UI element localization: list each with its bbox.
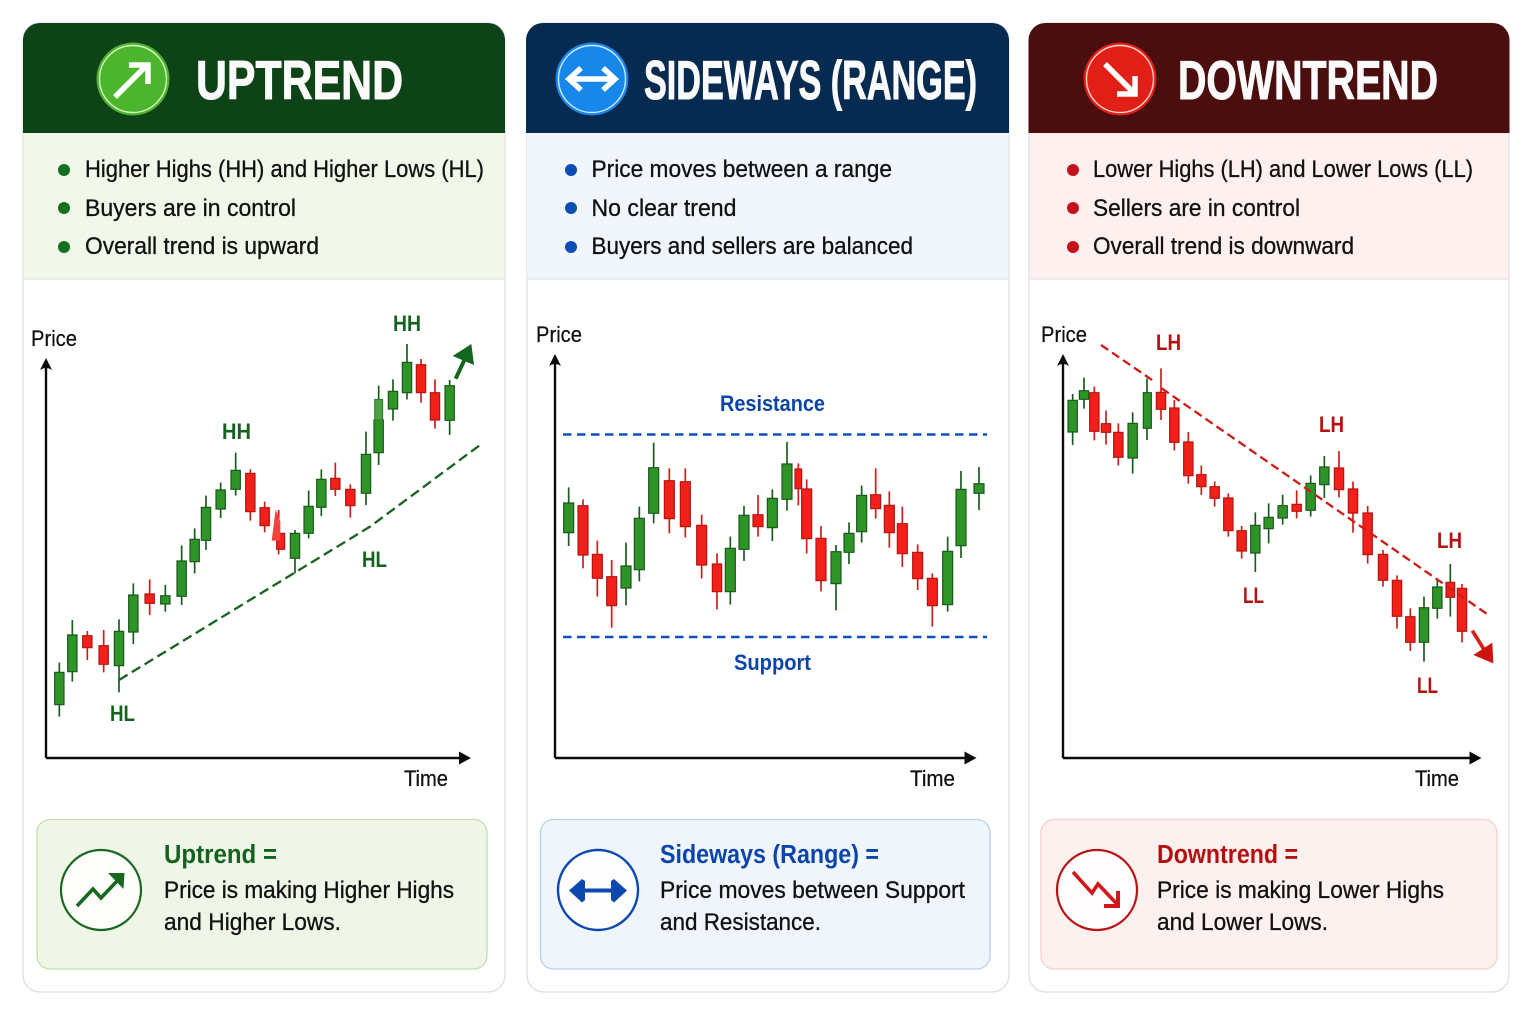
- callout heading: Downtrend =: Downtrend =: [1157, 841, 1298, 869]
- callout text: downtrend: and Lower Lows.: [1157, 909, 1328, 936]
- axes: downtrend: [1057, 354, 1482, 764]
- bullet list: sideways: Price moves between a range: [592, 156, 892, 183]
- icon: rising chart line: [61, 850, 141, 930]
- callout text: downtrend: [1157, 877, 1444, 936]
- panel: downtrend: [1028, 23, 1510, 992]
- bullet list: uptrend: Higher Highs (HH) and Higher Lows (HL): [85, 156, 484, 183]
- heading: DOWNTREND: DOWNTREND: [1178, 49, 1438, 111]
- callout text: uptrend: Price is making Higher Highs: [164, 877, 454, 904]
- bullet list: uptrend: Buyers are in control: [85, 195, 296, 222]
- axis label: Price: Price: [536, 322, 582, 347]
- bullet list: downtrend: Overall trend is downward: [1093, 233, 1354, 260]
- label: LH first: LH: [1156, 330, 1181, 355]
- label: HL low: HL: [110, 701, 135, 726]
- callout heading: Uptrend =: Uptrend =: [164, 841, 277, 869]
- header band: downtrend: [1028, 23, 1510, 133]
- panel frame: downtrend: [1029, 23, 1509, 992]
- callout text: sideways: and Resistance.: [660, 909, 821, 936]
- icon: up arrow badge: [96, 42, 170, 116]
- icon: down arrow badge: [1084, 42, 1156, 116]
- chart: sideways candlesticks: [536, 322, 987, 791]
- axis label: Price: Price: [31, 326, 77, 351]
- bullet list: sideways: No clear trend: [592, 195, 736, 222]
- heading: UPTREND: UPTREND: [196, 49, 403, 111]
- resistance line: [563, 433, 987, 436]
- label: LL first: LL: [1243, 583, 1264, 608]
- label: Resistance: Resistance: [720, 391, 825, 416]
- chart: downtrend candlesticks: [1041, 322, 1493, 791]
- callout heading: Sideways (Range) =: Sideways (Range) =: [660, 841, 879, 869]
- heading: SIDEWAYS (RANGE): SIDEWAYS (RANGE): [644, 49, 977, 111]
- axis label: Price: Price: [1041, 322, 1087, 347]
- callout: uptrend definition: [37, 820, 487, 969]
- label: HL middle: HL: [362, 547, 387, 572]
- candles and trendline: uptrend: [55, 344, 480, 717]
- panel: uptrend: [23, 23, 505, 992]
- bullet list: uptrend: Overall trend is upward: [85, 233, 319, 260]
- bullet list: downtrend: [1030, 133, 1508, 279]
- panel frame: sideways: [527, 23, 1009, 992]
- callout text: downtrend: Price is making Lower Highs: [1157, 877, 1444, 904]
- label: Support: Support: [734, 650, 812, 675]
- bullet list: uptrend: [24, 133, 504, 279]
- label: HH middle: HH: [222, 419, 251, 444]
- axes: sideways: [549, 354, 976, 764]
- label: LL second: LL: [1417, 673, 1438, 698]
- axis label: Time: Time: [910, 766, 955, 791]
- arrow: downtrend direction: [1472, 631, 1493, 663]
- callout text: sideways: Price moves between Support: [660, 877, 965, 904]
- candles: sideways: [564, 442, 984, 628]
- bullet list: sideways: Buyers and sellers are balanced: [592, 233, 913, 260]
- support line: [563, 636, 987, 638]
- callout: downtrend definition: [1041, 820, 1497, 969]
- label: LH third: LH: [1437, 528, 1462, 553]
- icon: falling chart line: [1057, 850, 1137, 930]
- icon: double arrow: [558, 850, 638, 930]
- panel: sideways range: [526, 23, 1009, 992]
- callout text: sideways: [660, 877, 965, 936]
- axes: uptrend: [40, 358, 471, 764]
- bullet list: downtrend: Sellers are in control: [1093, 195, 1300, 222]
- bullet list: downtrend: Lower Highs (LH) and Lower Lows (LL): [1093, 156, 1473, 183]
- label: LH second: LH: [1319, 412, 1344, 437]
- header band: sideways: [526, 23, 1009, 133]
- arrow: uptrend direction: [453, 344, 474, 379]
- header band: uptrend: [23, 23, 505, 133]
- panel frame: uptrend: [23, 23, 505, 992]
- bullet list: sideways: [527, 133, 1008, 279]
- callout text: uptrend: [164, 877, 454, 936]
- label: HH high: HH: [393, 311, 421, 336]
- candles and trendline: downtrend: [1068, 345, 1489, 662]
- axis label: Time: Time: [1415, 766, 1459, 791]
- axis label: Time: Time: [404, 766, 448, 791]
- callout text: uptrend: and Higher Lows.: [164, 909, 341, 936]
- icon: double arrow badge: [556, 42, 628, 116]
- chart: uptrend candlesticks: [31, 311, 480, 791]
- callout: sideways definition: [540, 820, 990, 969]
